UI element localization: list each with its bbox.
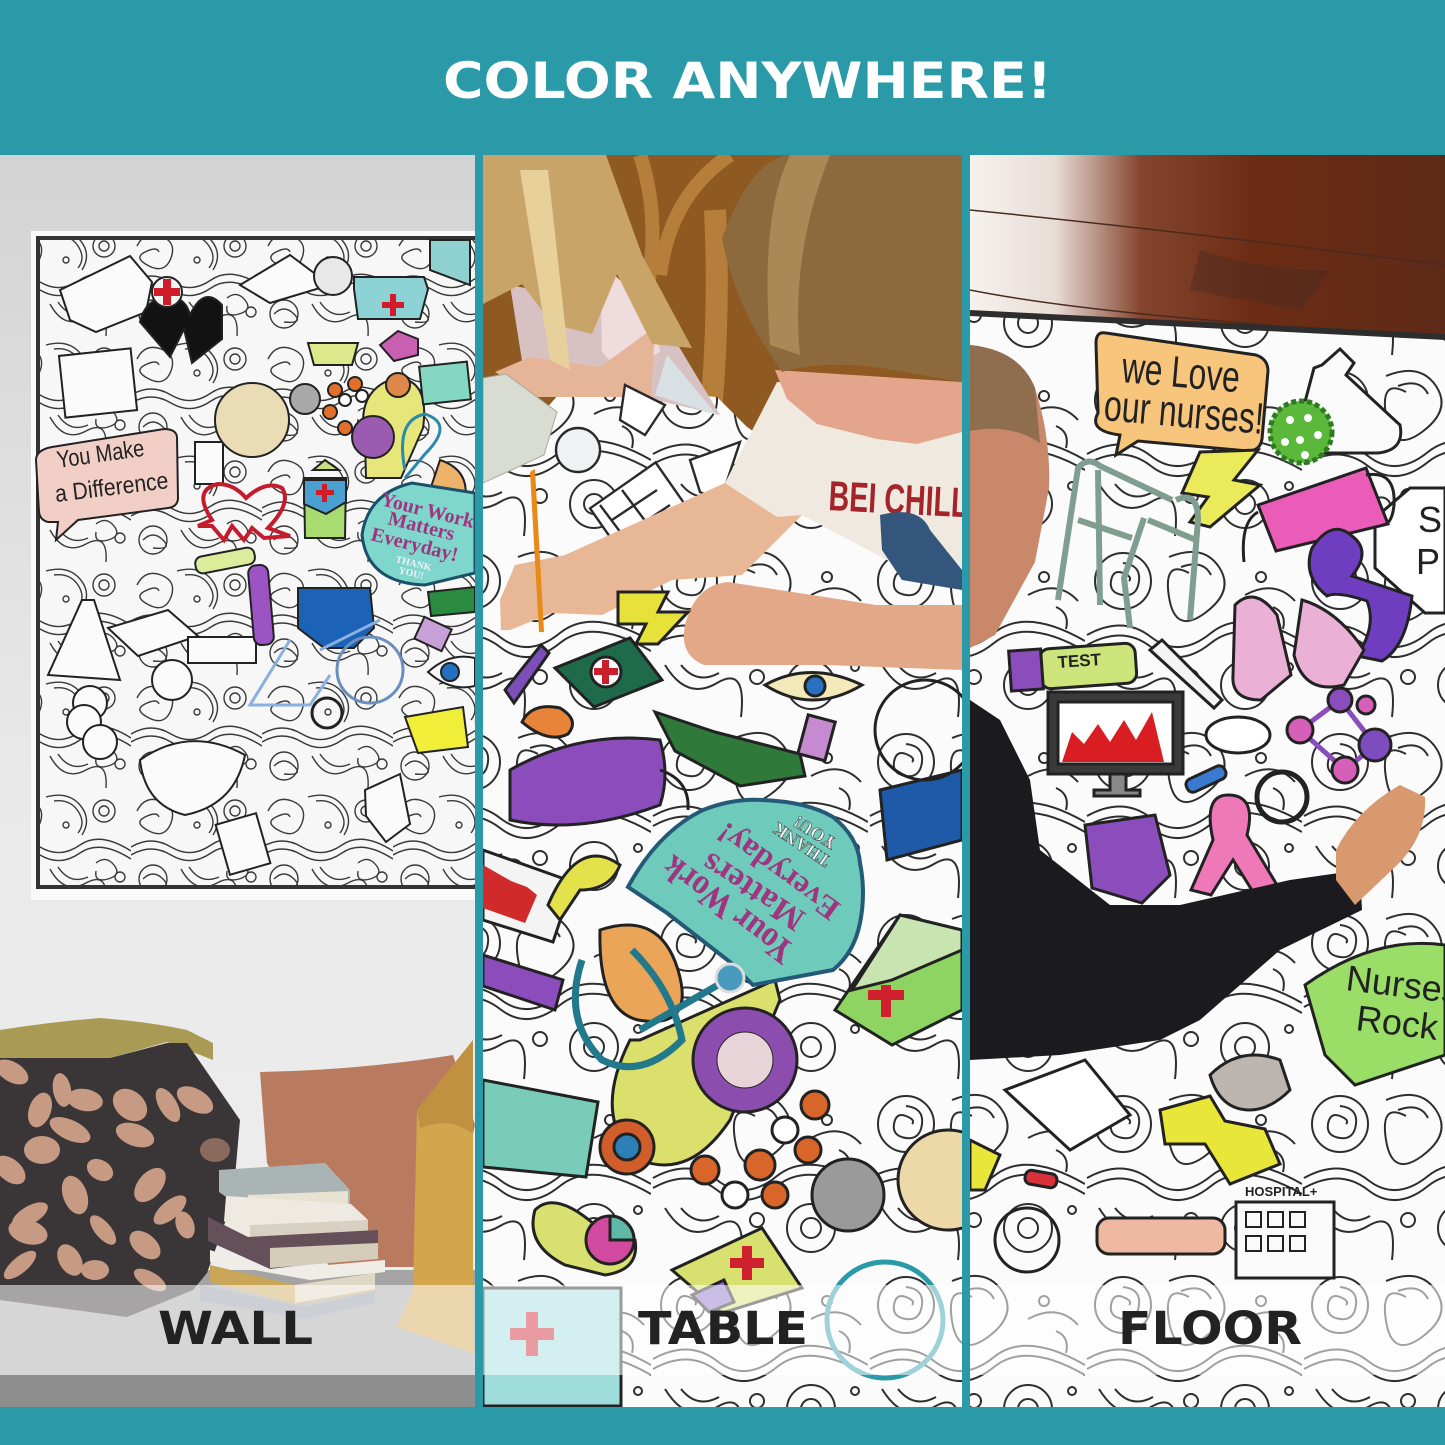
- monitor: [1048, 692, 1183, 774]
- speech bubble text: Your Work Matters Everyday: Matters: [386, 508, 457, 545]
- boy: [500, 155, 970, 670]
- panel: floor: [970, 155, 1445, 1407]
- label strip: wall: [0, 1285, 475, 1375]
- boy: BEI CHILL: [828, 472, 970, 526]
- poster words: [1057, 650, 1445, 1199]
- stop sign letter P: P: [1416, 541, 1440, 582]
- green bubble: [1305, 943, 1445, 1085]
- label strip: table: TABLE: [638, 1302, 808, 1355]
- ring: [1257, 772, 1307, 822]
- man arm in black sweater: [970, 700, 1362, 1060]
- medicine bag: [672, 1228, 802, 1313]
- bottom teal band: [0, 1407, 1445, 1445]
- pillow: [260, 1055, 475, 1267]
- divider right: [962, 155, 970, 1407]
- stop sign letter S: S: [1418, 499, 1442, 540]
- label strip: floor: FLOOR: [1118, 1302, 1302, 1355]
- virus: [1270, 401, 1332, 463]
- cells: [691, 1091, 829, 1208]
- man hand: [1336, 785, 1425, 905]
- speech bubble text: Your Work Matters Everyday: Everyday!: [369, 524, 460, 566]
- coloured doodles on table: [483, 592, 998, 1406]
- molecule: [1300, 700, 1375, 770]
- leaf basket: [0, 1043, 240, 1317]
- first aid box: [483, 1288, 621, 1406]
- speech bubble: You Make a Difference: [36, 429, 178, 540]
- bottle: [835, 915, 962, 1045]
- red pill: [1024, 1169, 1058, 1189]
- bandage: [898, 1130, 998, 1230]
- upside-down bubble text: Your Work: [654, 847, 802, 973]
- upside-down bubble text: Matters: [695, 845, 811, 937]
- teal pouch: [483, 1080, 598, 1177]
- girl: [483, 155, 720, 415]
- hospital: [1236, 1202, 1334, 1278]
- speech bubble: You Make a Difference: You Make: [55, 435, 146, 474]
- small yellow swirl: [548, 856, 620, 920]
- purple arrow: [1309, 529, 1412, 661]
- poster words: HOSPITAL+: [1245, 1184, 1318, 1199]
- upside-down bubble text: THANK: [769, 818, 834, 871]
- speech bubble text: Your Work Matters Everyday: THANK: [394, 554, 433, 574]
- title: COLOR ANYWHERE!: [443, 52, 1052, 110]
- orange swirl: [522, 707, 572, 737]
- crayon box: [483, 374, 557, 483]
- xray sheet: [1005, 1060, 1130, 1150]
- yellow lightning lower: [1160, 1096, 1280, 1184]
- tube: [483, 955, 563, 1010]
- speech bubble: we love our nurses: our nurses!: [1102, 381, 1266, 444]
- monitor: [483, 850, 573, 942]
- wheelchair: [880, 770, 962, 860]
- flask: [1298, 349, 1401, 453]
- book stack: [200, 1163, 385, 1319]
- wall poster: [31, 231, 480, 900]
- poster words: TEST: [1057, 650, 1102, 672]
- wall poster outlined doodles: [48, 240, 470, 875]
- wooden background: [483, 155, 962, 445]
- stethoscope: [575, 950, 730, 1067]
- upside-down bubble text: [654, 812, 846, 973]
- speech bubble: we love our nurses: [1096, 333, 1268, 455]
- chair shadowed top: [417, 1040, 473, 1134]
- upside-down bubble text: Everyday!: [710, 815, 846, 928]
- grey disc: [812, 1159, 884, 1231]
- blue pill: [1184, 764, 1228, 794]
- speech bubble: we love our nurses: we Love: [1119, 343, 1242, 402]
- label strip: floor: [970, 1285, 1445, 1375]
- poster words: Rock: [1354, 997, 1441, 1048]
- man head: [970, 345, 1049, 648]
- yellow lightning: [618, 592, 688, 644]
- purple mask: [1085, 815, 1170, 903]
- orange swirl large: [600, 925, 682, 1021]
- target: [600, 1120, 654, 1174]
- thermometer: [505, 645, 549, 703]
- green germ: [655, 712, 805, 786]
- eye: [765, 672, 862, 700]
- yellow shape at left edge: [970, 1140, 1000, 1190]
- speech bubble: You Make a Difference: a Difference: [53, 467, 170, 508]
- bandage: [1097, 1218, 1225, 1254]
- floor rug: [0, 1270, 475, 1407]
- chairs: [640, 155, 730, 410]
- wood floor: [970, 155, 1445, 335]
- wall poster coloured doodles: [140, 277, 475, 753]
- ribbon: [1191, 795, 1277, 895]
- upside-down bubble text: YOU!: [790, 812, 840, 854]
- speech bubble text: Your Work Matters Everyday: YOU!: [397, 565, 425, 582]
- panel: wall: [0, 155, 480, 1407]
- purple mask: [510, 738, 665, 825]
- basket leaf pattern: [0, 1054, 230, 1296]
- poster sheet: [970, 310, 1445, 1407]
- pink mask: [1258, 468, 1388, 551]
- grey cloud: [1210, 1055, 1290, 1110]
- lightning: [1182, 450, 1260, 527]
- coloured doodles on floor: [970, 401, 1445, 1278]
- speech bubble text: Your Work Matters Everyday: Your Work: [379, 489, 478, 533]
- walker: [1058, 461, 1198, 628]
- petri dish: [693, 1008, 797, 1112]
- panel: table: [483, 155, 998, 1407]
- razor: [1150, 640, 1222, 708]
- speech bubble: [628, 800, 863, 985]
- phone: [798, 715, 835, 761]
- big yellow swirl: [612, 980, 780, 1165]
- first aid bag: [555, 638, 662, 707]
- test tube: [1039, 643, 1137, 689]
- basket blanket: [0, 1018, 213, 1060]
- label strip: wall: WALL: [158, 1302, 313, 1355]
- table surface with doodles: [483, 385, 962, 1407]
- spiral: [995, 1208, 1059, 1272]
- poster edge: [970, 313, 1445, 337]
- lungs: [1233, 597, 1291, 700]
- yellow chair: [397, 1040, 473, 1353]
- label strip: table: [483, 1285, 962, 1375]
- hospital windows: [1246, 1212, 1305, 1251]
- divider left: [475, 155, 483, 1407]
- speech bubble text: Your Work Matters Everyday: [370, 492, 474, 579]
- pills: [533, 1203, 636, 1275]
- stop sign: [1375, 488, 1445, 613]
- doodle details near table top: [556, 385, 740, 558]
